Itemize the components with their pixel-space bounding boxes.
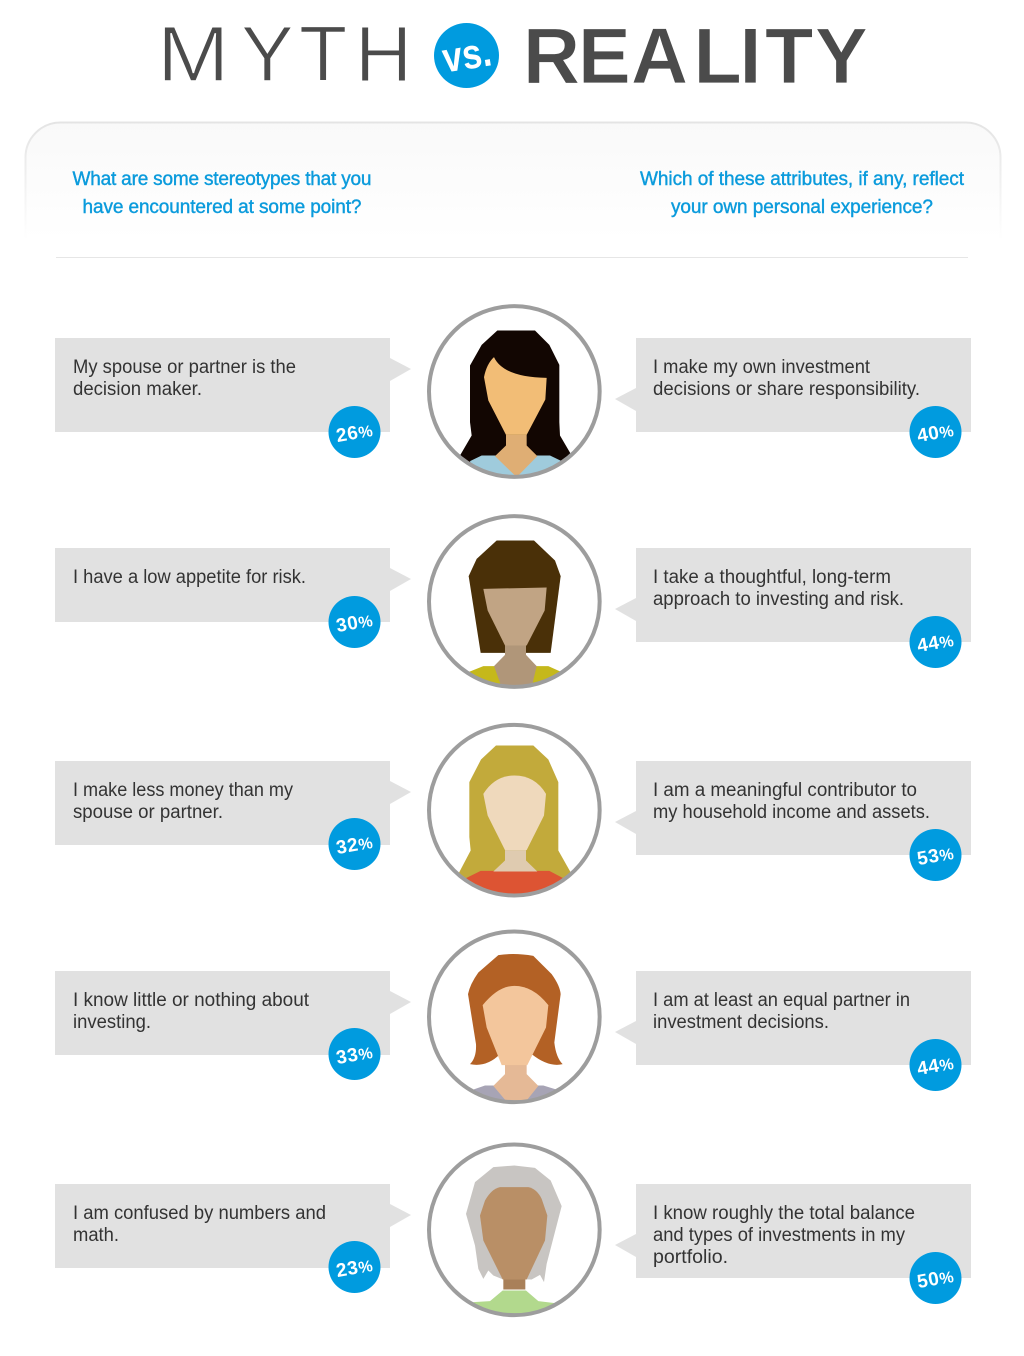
myth callout 4: I know little or nothing about	[73, 990, 310, 1011]
reality callout 5: portfolio.	[653, 1247, 728, 1268]
title word: myth: M	[157, 10, 229, 98]
title word: myth: YTH	[241, 9, 412, 98]
row 3	[55, 725, 971, 902]
myth callout 3: I make less money than my	[73, 780, 293, 801]
reality callout 2	[615, 548, 971, 668]
reality callout 5: 50%	[916, 1266, 956, 1293]
myth callout 3: spouse or partner.	[73, 802, 223, 823]
title word: myth	[157, 9, 412, 98]
reality callout 5	[615, 1184, 971, 1304]
title	[157, 9, 868, 100]
avatar 1	[429, 306, 600, 482]
myth callout 2: 30%	[335, 610, 375, 637]
row 4	[55, 931, 971, 1109]
myth callout 5: math.	[73, 1225, 119, 1246]
right question: Which of these attributes, if any, reflect	[640, 169, 965, 190]
title word: reality: REALITY	[523, 11, 868, 100]
reality callout 1: I make my own investment	[653, 357, 871, 378]
reality callout 3: I am a meaningful contributor to	[653, 780, 917, 801]
reality callout 3: my household income and assets.	[653, 802, 930, 823]
reality callout 4: investment decisions.	[653, 1012, 829, 1033]
reality callout 5: I know roughly the total balance	[653, 1203, 915, 1224]
row 5	[55, 1144, 971, 1322]
row 1	[55, 306, 971, 482]
reality callout 3: 53%	[916, 843, 956, 870]
myth callout 5: 23%	[335, 1255, 375, 1282]
reality callout 1	[615, 338, 971, 458]
myth callout 5	[55, 1184, 411, 1293]
avatar 5	[429, 1144, 600, 1322]
reality callout 4	[615, 971, 971, 1091]
myth callout 1: My spouse or partner is the	[73, 357, 296, 378]
myth callout 5: I am confused by numbers and	[73, 1203, 326, 1224]
reality callout 5: and types of investments in my	[653, 1225, 905, 1246]
myth callout 1	[55, 338, 411, 458]
reality callout 2: I take a thoughtful, long-term	[653, 567, 891, 588]
avatar 3	[429, 725, 600, 902]
header panel	[25, 122, 1001, 258]
row 2	[55, 516, 971, 692]
myth callout 4: 33%	[335, 1042, 375, 1069]
myth callout 2	[55, 548, 411, 648]
myth callout 4: investing.	[73, 1012, 151, 1033]
right question: your own personal experience?	[671, 197, 933, 218]
avatar 2	[429, 516, 600, 692]
badge: vs.: vs.	[439, 27, 495, 82]
myth callout 3	[55, 761, 411, 870]
reality callout 1: 40%	[916, 420, 956, 447]
myth callout 3: 32%	[335, 832, 375, 859]
myth callout 4	[55, 971, 411, 1080]
reality callout 4: I am at least an equal partner in	[653, 990, 910, 1011]
reality callout 2: approach to investing and risk.	[653, 589, 904, 610]
left question: What are some stereotypes that you	[72, 169, 372, 190]
myth callout 1: decision maker.	[73, 379, 202, 400]
reality callout 1: decisions or share responsibility.	[653, 379, 920, 400]
myth callout 1: 26%	[335, 420, 375, 447]
reality callout 4: 44%	[916, 1053, 956, 1080]
avatar 4	[429, 931, 600, 1109]
myth callout 2: I have a low appetite for risk.	[73, 567, 306, 588]
reality callout 2: 44%	[916, 630, 956, 657]
reality callout 3	[615, 761, 971, 881]
left question: have encountered at some point?	[82, 197, 362, 218]
